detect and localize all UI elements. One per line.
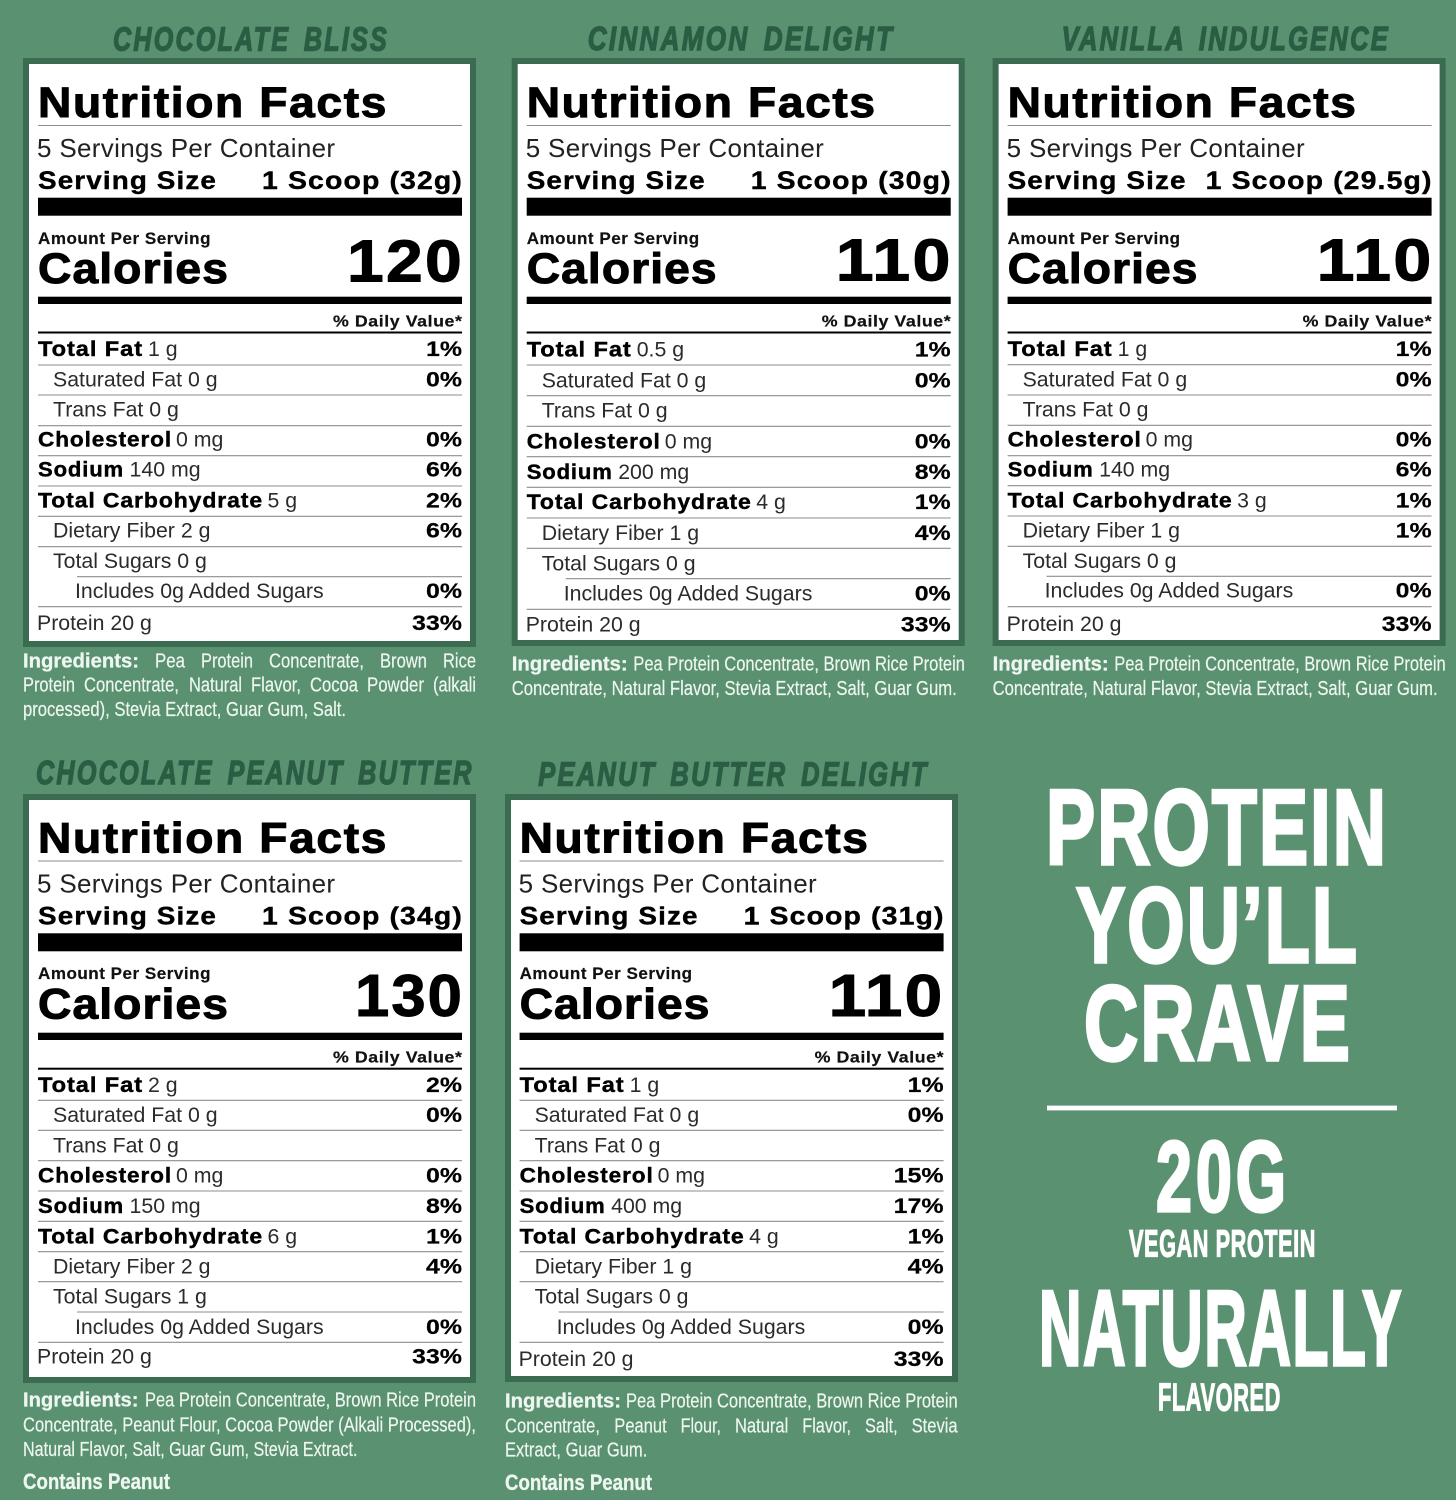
row: added sugars: 0% <box>426 1316 462 1339</box>
ingredients: Concentrate, Natural Flavor, Stevia Extract, Salt, Guar Gum. <box>512 678 957 700</box>
row: sodium: 6% <box>426 459 462 482</box>
ingredients: Natural Flavor, Salt, Guar Gum, Stevia Extract. <box>23 1439 358 1461</box>
serving size: Serving Size <box>520 902 699 930</box>
ingredients: Salt, <box>865 1415 898 1437</box>
row: cholesterol: 15% <box>894 1165 944 1188</box>
row: added sugars: 0% <box>908 1316 944 1339</box>
row: saturated fat: Saturated Fat 0 g <box>53 368 218 392</box>
amount per serving: Amount Per Serving <box>527 230 700 248</box>
ingredients: Ingredients: <box>512 654 628 676</box>
serving size: 1 Scoop (34g) <box>262 902 463 930</box>
serving size: Serving Size <box>527 167 706 195</box>
servings per container: 5 Servings Per Container <box>519 869 817 899</box>
ingredients: Extract, Guar Gum. <box>505 1440 647 1462</box>
protein claim <box>1129 1121 1316 1266</box>
row: sodium: 200 mg <box>618 460 689 484</box>
row: cholesterol <box>520 1164 944 1188</box>
panel: claims <box>1039 767 1403 1420</box>
calories <box>527 228 953 294</box>
row: total fat: 1% <box>908 1074 944 1097</box>
row: total carbohydrate: Total Carbohydrate <box>1008 489 1233 512</box>
row: total carbohydrate <box>1008 488 1432 512</box>
row: dietary fiber: Dietary Fiber 2 g <box>53 518 210 542</box>
protein claim: 20G <box>1156 1121 1290 1233</box>
row: sodium: Sodium <box>520 1195 606 1218</box>
row: total carbohydrate: 5 g <box>268 488 297 512</box>
row: saturated fat: 0% <box>1396 369 1432 392</box>
row: total fat: 1 g <box>1118 337 1147 361</box>
row: total sugars: Total Sugars 0 g <box>542 552 696 576</box>
ingredients: Pea Protein Concentrate, Brown Rice Protein <box>633 654 965 676</box>
panel: peanut butter delight <box>505 756 958 1495</box>
row: sodium: 17% <box>894 1195 944 1218</box>
row: added sugars: 0% <box>1396 580 1432 603</box>
label frame <box>26 61 473 644</box>
calories <box>38 963 464 1029</box>
ingredients: Protein <box>201 650 253 672</box>
row: protein <box>526 613 951 637</box>
label title: Nutrition Facts <box>38 80 388 127</box>
serving size <box>520 902 945 930</box>
label title: Nutrition Facts <box>520 816 870 862</box>
row: saturated fat: 0% <box>426 1104 462 1127</box>
row: total sugars: Total Sugars 0 g <box>1023 549 1177 573</box>
row: cholesterol: 0% <box>915 430 951 453</box>
row: dietary fiber: Dietary Fiber 1 g <box>535 1254 692 1278</box>
daily value header: % Daily Value* <box>1303 314 1432 330</box>
row: dietary fiber: Dietary Fiber 1 g <box>1023 519 1180 543</box>
row: trans fat: Trans Fat 0 g <box>53 398 179 422</box>
row: total fat <box>520 1073 944 1097</box>
row: total fat: 1% <box>915 339 951 362</box>
row: sodium: 150 mg <box>130 1194 201 1218</box>
panel: vanilla indulgence <box>993 21 1446 700</box>
row: trans fat: Trans Fat 0 g <box>535 1133 660 1157</box>
row: added sugars <box>557 1315 944 1339</box>
serving size: 1 Scoop (30g) <box>751 167 952 195</box>
row: saturated fat <box>535 1103 944 1127</box>
row: sodium <box>38 1194 462 1218</box>
row: total fat: 1 g <box>148 337 178 361</box>
row: total carbohydrate <box>38 488 462 512</box>
row: sodium: 8% <box>426 1195 462 1218</box>
row: cholesterol: 0 mg <box>658 1164 705 1188</box>
allergen note: Contains Peanut <box>23 1469 171 1494</box>
row: total fat: 2% <box>426 1074 462 1097</box>
row: protein: Protein 20 g <box>519 1347 633 1371</box>
ingredients: Natural <box>189 675 242 697</box>
row: total fat: 0.5 g <box>637 338 684 362</box>
row: dietary fiber: 1% <box>1396 520 1432 543</box>
row: sodium: 140 mg <box>1099 458 1170 482</box>
row: protein: Protein 20 g <box>37 1345 152 1369</box>
ingredients <box>23 650 476 721</box>
ingredients: processed), Stevia Extract, Guar Gum, Salt. <box>23 699 346 721</box>
label frame <box>26 797 473 1380</box>
row: sodium: 400 mg <box>611 1194 682 1218</box>
row: sodium: 140 mg <box>130 458 201 482</box>
serving size: Serving Size <box>38 902 217 930</box>
row: added sugars <box>75 1315 462 1339</box>
row: added sugars <box>564 582 951 606</box>
flavor claim: FLAVORED <box>1158 1376 1281 1420</box>
ingredients: Flavor, <box>251 675 301 697</box>
label title: Nutrition Facts <box>527 80 877 127</box>
row: added sugars <box>75 579 462 603</box>
amount per serving: Amount Per Serving <box>38 230 211 248</box>
row: total carbohydrate: Total Carbohydrate <box>38 1225 263 1248</box>
ingredients: Stevia <box>912 1415 958 1437</box>
row: saturated fat: 0% <box>915 369 951 392</box>
ingredients: Pea <box>155 650 186 672</box>
row: protein: 33% <box>1382 613 1432 636</box>
protein claim: VEGAN PROTEIN <box>1129 1224 1316 1266</box>
row: saturated fat: Saturated Fat 0 g <box>53 1103 218 1127</box>
row: added sugars: 0% <box>915 583 951 606</box>
row: saturated fat <box>1023 368 1432 392</box>
serving size: 1 Scoop (31g) <box>744 902 945 930</box>
allergen note: Contains Peanut <box>505 1470 653 1495</box>
row: total fat: Total Fat <box>38 1074 143 1097</box>
flavor heading: CHOCOLATE PEANUT BUTTER <box>36 755 474 792</box>
row: total carbohydrate: Total Carbohydrate <box>38 489 263 512</box>
servings per container: 5 Servings Per Container <box>37 869 335 899</box>
flavor heading: PEANUT BUTTER DELIGHT <box>538 756 929 794</box>
daily value header: % Daily Value* <box>815 1050 944 1067</box>
row: total carbohydrate: 1% <box>1396 489 1432 512</box>
ingredients: Concentrate, <box>505 1415 600 1437</box>
row: protein: 33% <box>412 612 462 635</box>
calories: Calories <box>38 245 229 293</box>
row: cholesterol: Cholesterol <box>38 1165 172 1188</box>
row: total fat: Total Fat <box>38 338 143 361</box>
ingredients: Ingredients: <box>505 1391 621 1413</box>
calories: Calories <box>520 980 711 1028</box>
row: dietary fiber <box>535 1254 944 1278</box>
serving size <box>527 167 952 195</box>
row: total carbohydrate: Total Carbohydrate <box>527 491 752 514</box>
label frame <box>515 61 962 643</box>
row: total carbohydrate: 1% <box>908 1225 944 1248</box>
calories <box>1008 228 1434 294</box>
row: total fat: 1% <box>426 338 462 361</box>
row: protein: 33% <box>894 1348 944 1371</box>
ingredients: Pea Protein Concentrate, Brown Rice Protein <box>626 1391 958 1413</box>
ingredients <box>23 1390 476 1461</box>
ingredients: Concentrate, <box>269 650 364 672</box>
ingredients: Brown <box>380 650 427 672</box>
ingredients: Natural <box>735 1415 788 1437</box>
row: cholesterol: 0 mg <box>1146 428 1193 452</box>
daily value header: % Daily Value* <box>333 1050 463 1067</box>
calories: 120 <box>347 228 464 294</box>
row: dietary fiber: 4% <box>908 1255 944 1278</box>
ingredients: Ingredients: <box>993 654 1109 676</box>
row: cholesterol <box>1008 428 1432 452</box>
serving size: 1 Scoop (32g) <box>262 167 463 195</box>
headline: CRAVE <box>1084 963 1352 1083</box>
row: cholesterol <box>527 429 951 453</box>
row: cholesterol: Cholesterol <box>1008 429 1142 452</box>
row: total fat: Total Fat <box>520 1074 625 1097</box>
row: added sugars <box>1045 579 1432 603</box>
row: sodium: 8% <box>915 461 951 484</box>
servings per container: 5 Servings Per Container <box>526 133 824 163</box>
ingredients <box>505 1391 958 1462</box>
serving size: Serving Size <box>38 167 217 195</box>
row: cholesterol: Cholesterol <box>520 1165 654 1188</box>
serving size: 1 Scoop (29.5g) <box>1206 167 1433 195</box>
row: protein: Protein 20 g <box>37 611 152 635</box>
row: cholesterol: 0% <box>426 429 462 452</box>
serving size <box>38 167 463 195</box>
row: cholesterol: 0 mg <box>176 428 223 452</box>
row: cholesterol: 0 mg <box>665 429 712 453</box>
row: cholesterol: Cholesterol <box>527 430 661 453</box>
ingredients: (alkali <box>433 675 476 697</box>
row: cholesterol <box>38 1164 462 1188</box>
row: total carbohydrate: Total Carbohydrate <box>520 1225 745 1248</box>
row: added sugars: Includes 0g Added Sugars <box>1045 579 1293 603</box>
row: total sugars: Total Sugars 0 g <box>53 549 207 573</box>
serving size: Serving Size <box>1008 167 1187 195</box>
row: protein: 33% <box>412 1346 462 1369</box>
row: cholesterol: Cholesterol <box>38 429 172 452</box>
row: protein <box>1007 612 1432 636</box>
calories <box>38 228 464 294</box>
row: total fat: Total Fat <box>527 339 632 362</box>
row: trans fat: Trans Fat 0 g <box>1023 398 1148 422</box>
row: total carbohydrate: 6 g <box>268 1224 297 1248</box>
label frame <box>996 61 1443 643</box>
ingredients: Peanut <box>614 1415 667 1437</box>
calories: Calories <box>1008 245 1199 293</box>
row: saturated fat: 0% <box>908 1104 944 1127</box>
serving size <box>1008 167 1433 195</box>
calories: Calories <box>38 980 229 1028</box>
daily value header: % Daily Value* <box>333 314 463 330</box>
row: saturated fat: Saturated Fat 0 g <box>535 1103 699 1127</box>
label title: Nutrition Facts <box>1008 80 1358 127</box>
row: total carbohydrate: 1% <box>915 491 951 514</box>
panel: chocolate peanut butter <box>23 755 476 1494</box>
row: sodium: Sodium <box>527 461 613 484</box>
calories <box>520 963 945 1029</box>
servings per container: 5 Servings Per Container <box>1007 133 1305 163</box>
row: sodium <box>1008 458 1432 482</box>
ingredients: Rice <box>443 650 476 672</box>
row: dietary fiber: 6% <box>426 519 462 542</box>
ingredients <box>512 654 965 700</box>
row: dietary fiber <box>53 518 462 542</box>
row: total carbohydrate <box>520 1224 944 1248</box>
row: trans fat: Trans Fat 0 g <box>53 1133 179 1157</box>
headline <box>1046 767 1388 1083</box>
amount per serving: Amount Per Serving <box>38 965 211 983</box>
ingredients: Ingredients: <box>23 650 139 672</box>
calories: 130 <box>355 963 464 1029</box>
flavor heading: CINNAMON DELIGHT <box>588 21 894 58</box>
label frame <box>508 797 955 1379</box>
row: saturated fat: 0% <box>426 369 462 392</box>
row: added sugars: Includes 0g Added Sugars <box>75 579 324 603</box>
row: added sugars: 0% <box>426 580 462 603</box>
ingredients: Flavor, <box>802 1415 851 1437</box>
ingredients <box>993 654 1446 700</box>
ingredients: Protein <box>23 675 75 697</box>
row: sodium <box>527 460 951 484</box>
amount per serving: Amount Per Serving <box>520 965 693 983</box>
row: dietary fiber: Dietary Fiber 1 g <box>542 521 699 545</box>
row: total fat: 1 g <box>630 1073 659 1097</box>
row: sodium: Sodium <box>1008 459 1094 482</box>
servings per container: 5 Servings Per Container <box>37 133 335 163</box>
row: total fat: 2 g <box>148 1073 178 1097</box>
row: dietary fiber <box>542 521 951 545</box>
row: sodium: Sodium <box>38 1195 124 1218</box>
row: total sugars: Total Sugars 0 g <box>535 1285 689 1309</box>
row: dietary fiber <box>1023 519 1432 543</box>
ingredients: Concentrate, Peanut Flour, Cocoa Powder (Alkali Processed), <box>23 1415 476 1437</box>
row: protein <box>37 1345 462 1369</box>
daily value header: % Daily Value* <box>822 314 952 330</box>
row: sodium: Sodium <box>38 459 124 482</box>
row: saturated fat <box>53 368 462 392</box>
row: saturated fat: Saturated Fat 0 g <box>542 368 706 392</box>
ingredients: Pea Protein Concentrate, Brown Rice Protein <box>145 1390 476 1412</box>
row: sodium: 6% <box>1396 459 1432 482</box>
row: total fat <box>1008 337 1432 361</box>
row: dietary fiber: 4% <box>915 522 951 545</box>
ingredients: Cocoa <box>310 675 359 697</box>
ingredients: Ingredients: <box>23 1390 138 1412</box>
row: cholesterol: 0% <box>426 1165 462 1188</box>
amount per serving: Amount Per Serving <box>1008 230 1181 248</box>
calories: 110 <box>829 963 945 1029</box>
serving size <box>38 902 463 930</box>
ingredients: Powder <box>367 675 424 697</box>
calories: 110 <box>1317 228 1434 294</box>
row: total fat: 1% <box>1396 338 1432 361</box>
row: sodium <box>38 458 462 482</box>
row: cholesterol: 0% <box>1396 429 1432 452</box>
row: cholesterol: 0 mg <box>176 1164 223 1188</box>
row: trans fat: Trans Fat 0 g <box>542 398 668 422</box>
row: added sugars: Includes 0g Added Sugars <box>557 1315 805 1339</box>
row: added sugars: Includes 0g Added Sugars <box>564 582 812 606</box>
row: sodium <box>520 1194 944 1218</box>
row: protein: Protein 20 g <box>1007 612 1121 636</box>
row: dietary fiber: Dietary Fiber 2 g <box>53 1254 210 1278</box>
calories: 110 <box>836 228 953 294</box>
ingredients: Concentrate, <box>84 675 179 697</box>
row: dietary fiber: 4% <box>426 1255 462 1278</box>
row: total carbohydrate <box>38 1224 462 1248</box>
row: dietary fiber <box>53 1254 462 1278</box>
row: cholesterol <box>38 428 462 452</box>
row: total carbohydrate: 4 g <box>756 490 786 514</box>
row: protein: Protein 20 g <box>526 613 641 637</box>
row: saturated fat <box>53 1103 462 1127</box>
row: total fat <box>38 1073 462 1097</box>
calories: Calories <box>527 245 718 293</box>
row: protein: 33% <box>901 614 951 637</box>
row: total fat: Total Fat <box>1008 338 1113 361</box>
row: total fat <box>527 338 951 362</box>
row: total sugars: Total Sugars 1 g <box>53 1285 207 1309</box>
row: protein <box>519 1347 944 1371</box>
label title: Nutrition Facts <box>38 816 388 862</box>
row: saturated fat: Saturated Fat 0 g <box>1023 368 1187 392</box>
panel: cinnamon delight <box>512 21 965 700</box>
row: total carbohydrate: 2% <box>426 489 462 512</box>
row: saturated fat <box>542 368 951 392</box>
panel: chocolate bliss <box>23 22 476 721</box>
row: total carbohydrate: 1% <box>426 1225 462 1248</box>
row: total fat <box>38 337 462 361</box>
flavor heading: CHOCOLATE BLISS <box>113 22 389 58</box>
row: protein <box>37 611 462 635</box>
row: total carbohydrate <box>527 490 951 514</box>
ingredients: Flour, <box>681 1415 721 1437</box>
row: total carbohydrate: 4 g <box>749 1224 779 1248</box>
row: added sugars: Includes 0g Added Sugars <box>75 1315 324 1339</box>
row: total carbohydrate: 3 g <box>1237 488 1267 512</box>
